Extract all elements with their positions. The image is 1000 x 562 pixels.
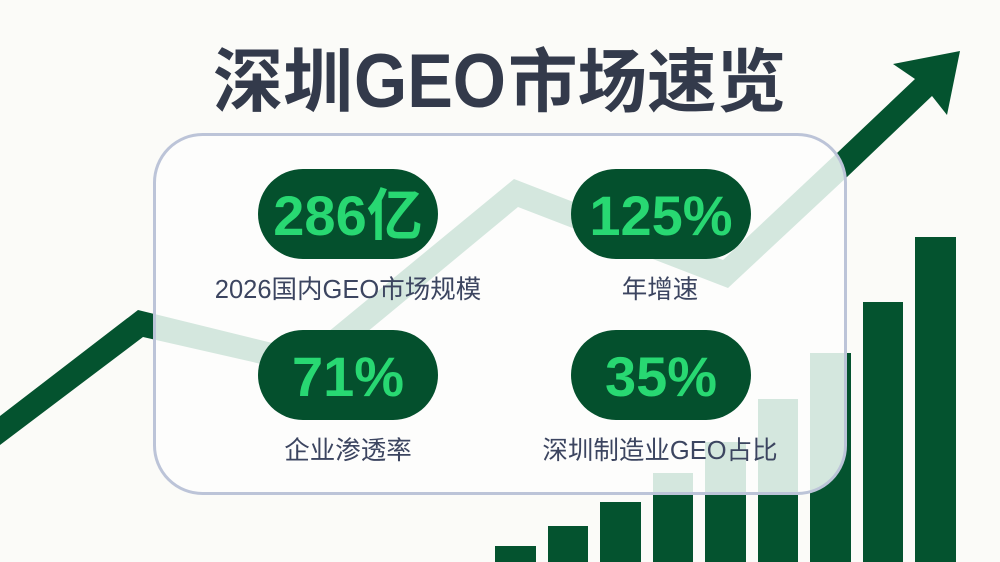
label: enterprise penetration: 企业渗透率: [284, 437, 412, 465]
label: annual growth: 年增速: [622, 276, 698, 304]
pill: 125%: [571, 169, 751, 259]
title: GEO: [354, 39, 506, 124]
panel: metrics: [153, 133, 847, 495]
pill: 125%: 125%: [589, 184, 733, 247]
label: manufacturing share: 深圳制造业GEO占比: [542, 437, 778, 465]
bar chart: [495, 237, 956, 562]
title: 市场速览: [508, 43, 786, 121]
title: [213, 39, 786, 124]
pill: 35%: 35%: [605, 345, 717, 408]
pill: 286亿: 286亿: [273, 184, 423, 247]
pill: 286亿: [258, 169, 438, 259]
metric: manufacturing share: [542, 330, 778, 465]
label: market size: 2026国内GEO市场规模: [215, 276, 481, 304]
title: 深圳: [213, 43, 353, 121]
metric: market size: [215, 169, 481, 304]
arrow: rising trend line: [0, 51, 960, 445]
pill: 71%: [258, 330, 438, 420]
pill: 35%: [571, 330, 751, 420]
metric: annual growth: [571, 169, 751, 304]
metric: enterprise penetration: [258, 330, 438, 465]
pill: 71%: 71%: [292, 345, 404, 408]
